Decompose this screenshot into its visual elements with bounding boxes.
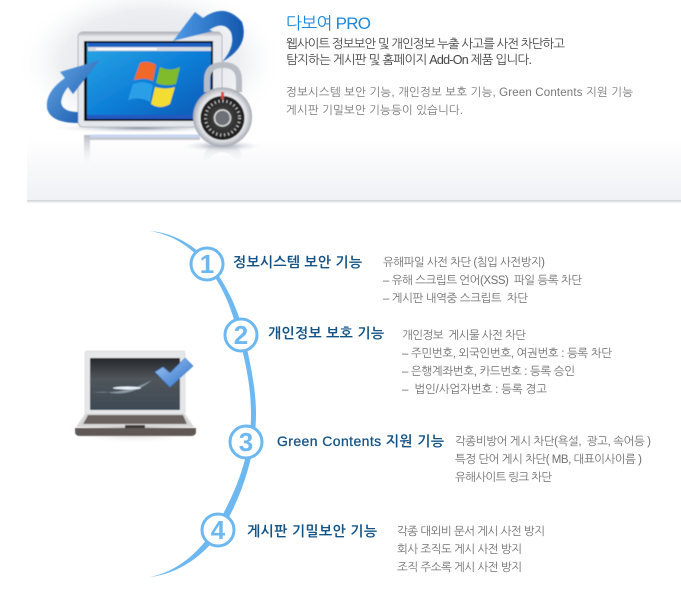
step number badge 1 (191, 248, 223, 280)
step 2: personal information protection (225, 319, 612, 396)
text block: feature overview: 게시판 기밀보안 기능등이 있습니다. (286, 104, 463, 117)
step 2 details: – 주민번호, 외국인번호, 여권번호 : 등록 차단 (402, 347, 612, 360)
icon: right arrow (173, 11, 244, 62)
text block: product summary: 탐지하는 게시판 및 홈페이지 Add-On 제품 입니다. (286, 53, 532, 67)
step number badge 4 (202, 514, 234, 546)
title: 다보여 PRO (286, 14, 371, 33)
step 1 details (383, 256, 582, 305)
icon: left arrow (47, 60, 100, 123)
step number badge 1: 1 (200, 249, 214, 279)
icon: laptop with check mark (63, 351, 207, 444)
step 3: green contents support (230, 426, 651, 484)
step 4 details: 회사 조직도 게시 사전 방지 (397, 543, 522, 556)
step 4 heading: 게시판 기밀보안 기능 (247, 523, 377, 539)
panel: header background (15, 0, 681, 203)
step 2 heading: 개인정보 보호 기능 (268, 325, 384, 341)
step 3 details: 특정 단어 게시 차단( MB, 대표이사이름 ) (455, 453, 642, 466)
step 2 details: 개인정보 게시물 사전 차단 (402, 329, 526, 342)
icon: check mark (155, 358, 193, 387)
step 3 details: 유해사이트 링크 차단 (455, 471, 552, 484)
step 1 details: – 유해 스크립트 언어(XSS) 파일 등록 차단 (383, 274, 582, 287)
step 1 details: – 게시판 내역중 스크립트 차단 (383, 292, 528, 305)
icon: padlock (180, 65, 264, 165)
step 2 details (402, 329, 612, 396)
step 4: board confidentiality (202, 514, 545, 574)
step 4 details: 각종 대외비 문서 게시 사전 방지 (397, 525, 545, 538)
step 4 details (397, 525, 545, 574)
text block: product summary (286, 37, 565, 67)
step 2 details: – 법인/사업자번호 : 등록 경고 (402, 383, 547, 396)
step number badge 3: 3 (239, 427, 253, 457)
text block: product summary: 웹사이트 정보보안 및 개인정보 누출 사고를 사전 차단하고 (286, 37, 565, 51)
step 1: information system security (191, 248, 582, 305)
step 3 details: 각종비방어 게시 차단(욕설, 광고, 속어등 ) (455, 435, 651, 448)
step number badge 2: 2 (234, 320, 248, 350)
step number badge 4: 4 (211, 515, 226, 545)
text block: feature overview (286, 86, 633, 117)
step number badge 3 (230, 426, 262, 458)
step 4 details: 조직 주소록 게시 사전 방지 (397, 561, 522, 574)
text block: feature overview: 정보시스템 보안 기능, 개인정보 보호 기능, Green Contents 지원 기능 (286, 86, 633, 99)
step 1 heading: 정보시스템 보안 기능 (233, 254, 362, 270)
step 3 details (455, 435, 651, 484)
timeline arc (150, 231, 256, 577)
step number badge 2 (225, 319, 257, 351)
step 3 heading: Green Contents 지원 기능 (277, 433, 444, 449)
step 2 details: – 은행계좌번호, 카드번호 : 등록 승인 (402, 365, 575, 378)
icon: browser monitor with arrows and padlock (45, 11, 264, 168)
step 1 details: 유해파일 사전 차단 (침입 사전방지) (383, 256, 545, 269)
icon: windows logo (128, 62, 180, 107)
